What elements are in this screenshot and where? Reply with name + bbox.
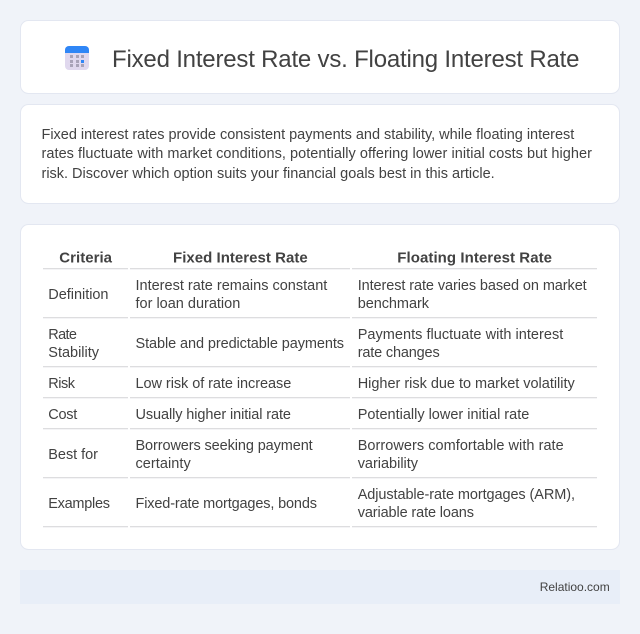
table row: cost: Potentially lower initial rate [358, 407, 529, 423]
panel: introduction card [20, 104, 620, 204]
panel: title card [20, 20, 620, 94]
panel: comparison table card [20, 224, 620, 550]
text block: introduction: Fixed interest rates provide consistent payments and stability, while floating interest [42, 127, 574, 143]
table row: examples: Adjustable-rate mortgages (ARM), [358, 487, 575, 503]
title: Fixed Interest Rate vs. Floating Interest Rate [112, 46, 580, 73]
table row: definition: for loan duration [136, 296, 240, 312]
table header row [59, 250, 552, 267]
table row: best for: Best for [48, 447, 98, 463]
table row: rate stability [48, 327, 563, 361]
table header row: Floating Interest Rate [397, 250, 552, 267]
table header row: Criteria [59, 250, 113, 267]
table row: examples: Examples [48, 496, 110, 512]
icon: calendar [65, 46, 89, 70]
table row: rate stability: Rate [48, 327, 77, 343]
table row: definition: Definition [48, 287, 108, 303]
table row: best for: Borrowers comfortable with rate [358, 438, 564, 454]
table row: rate stability: rate changes [358, 345, 440, 361]
table row: best for: variability [358, 456, 419, 472]
text block: introduction: risk. Discover which option suits your financial goals best in this article. [42, 166, 495, 182]
table row: definition [48, 278, 587, 312]
table row: cost [48, 407, 529, 423]
table row: definition: benchmark [358, 296, 430, 312]
table row: definition: Interest rate remains constant [136, 278, 327, 294]
table row: cost: Cost [48, 407, 77, 423]
text block: introduction: rates fluctuate with market conditions, potentially offering lower initial costs but higher [42, 146, 592, 162]
table row: examples: Fixed-rate mortgages, bonds [136, 496, 317, 512]
table row: rate stability: Payments fluctuate with interest [358, 327, 563, 343]
table row: risk: Risk [48, 376, 76, 392]
table row: best for: certainty [136, 456, 191, 472]
footer credit: Relatioo.com [540, 580, 610, 594]
footer bar [20, 570, 620, 604]
table row: cost: Usually higher initial rate [136, 407, 291, 423]
table row: rate stability: Stable and predictable payments [136, 336, 344, 352]
table row: risk: Low risk of rate increase [136, 376, 291, 392]
table row: definition: Interest rate varies based on market [358, 278, 587, 294]
table row: risk: Higher risk due to market volatility [358, 376, 575, 392]
table header row: Fixed Interest Rate [173, 250, 308, 267]
table row: risk [48, 376, 575, 392]
text block: introduction [42, 127, 592, 182]
table row: rate stability: Stability [48, 345, 100, 361]
table row: best for [48, 438, 564, 472]
table row: examples [48, 487, 575, 521]
table row: examples: variable rate loans [358, 505, 474, 521]
table row: best for: Borrowers seeking payment [136, 438, 313, 454]
